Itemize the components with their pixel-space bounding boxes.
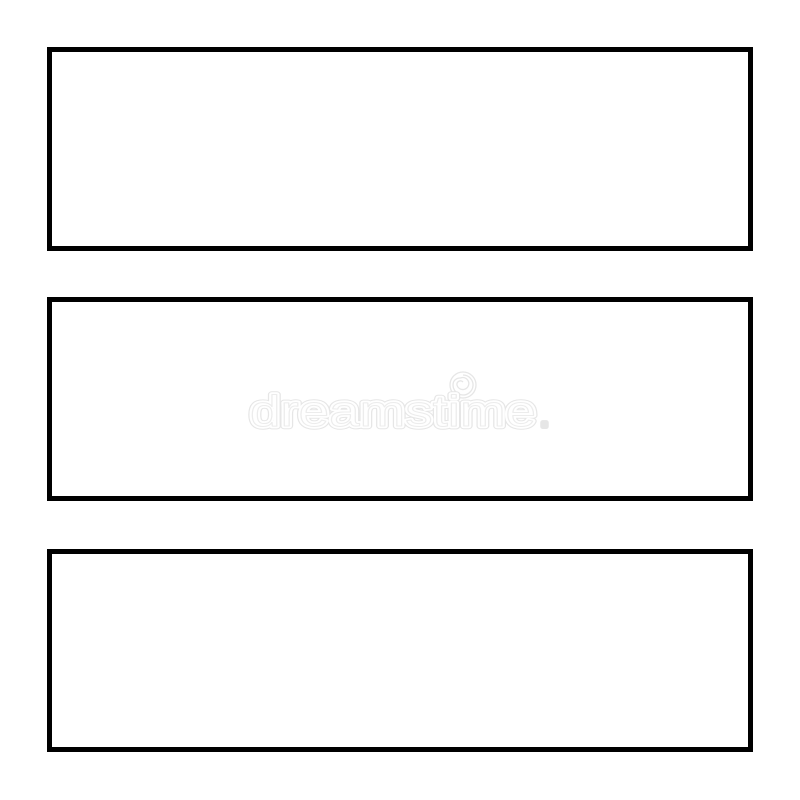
watermark text: dreamstime <box>250 387 536 436</box>
watermark dot: . <box>540 394 550 434</box>
icon: watermark spiral <box>450 372 476 398</box>
panel: middle frame <box>47 297 753 501</box>
watermark text: dreamstime <box>250 387 536 436</box>
watermark text: dreamstime <box>250 387 536 436</box>
panel: top frame <box>47 47 753 251</box>
panel: bottom frame <box>47 549 753 752</box>
